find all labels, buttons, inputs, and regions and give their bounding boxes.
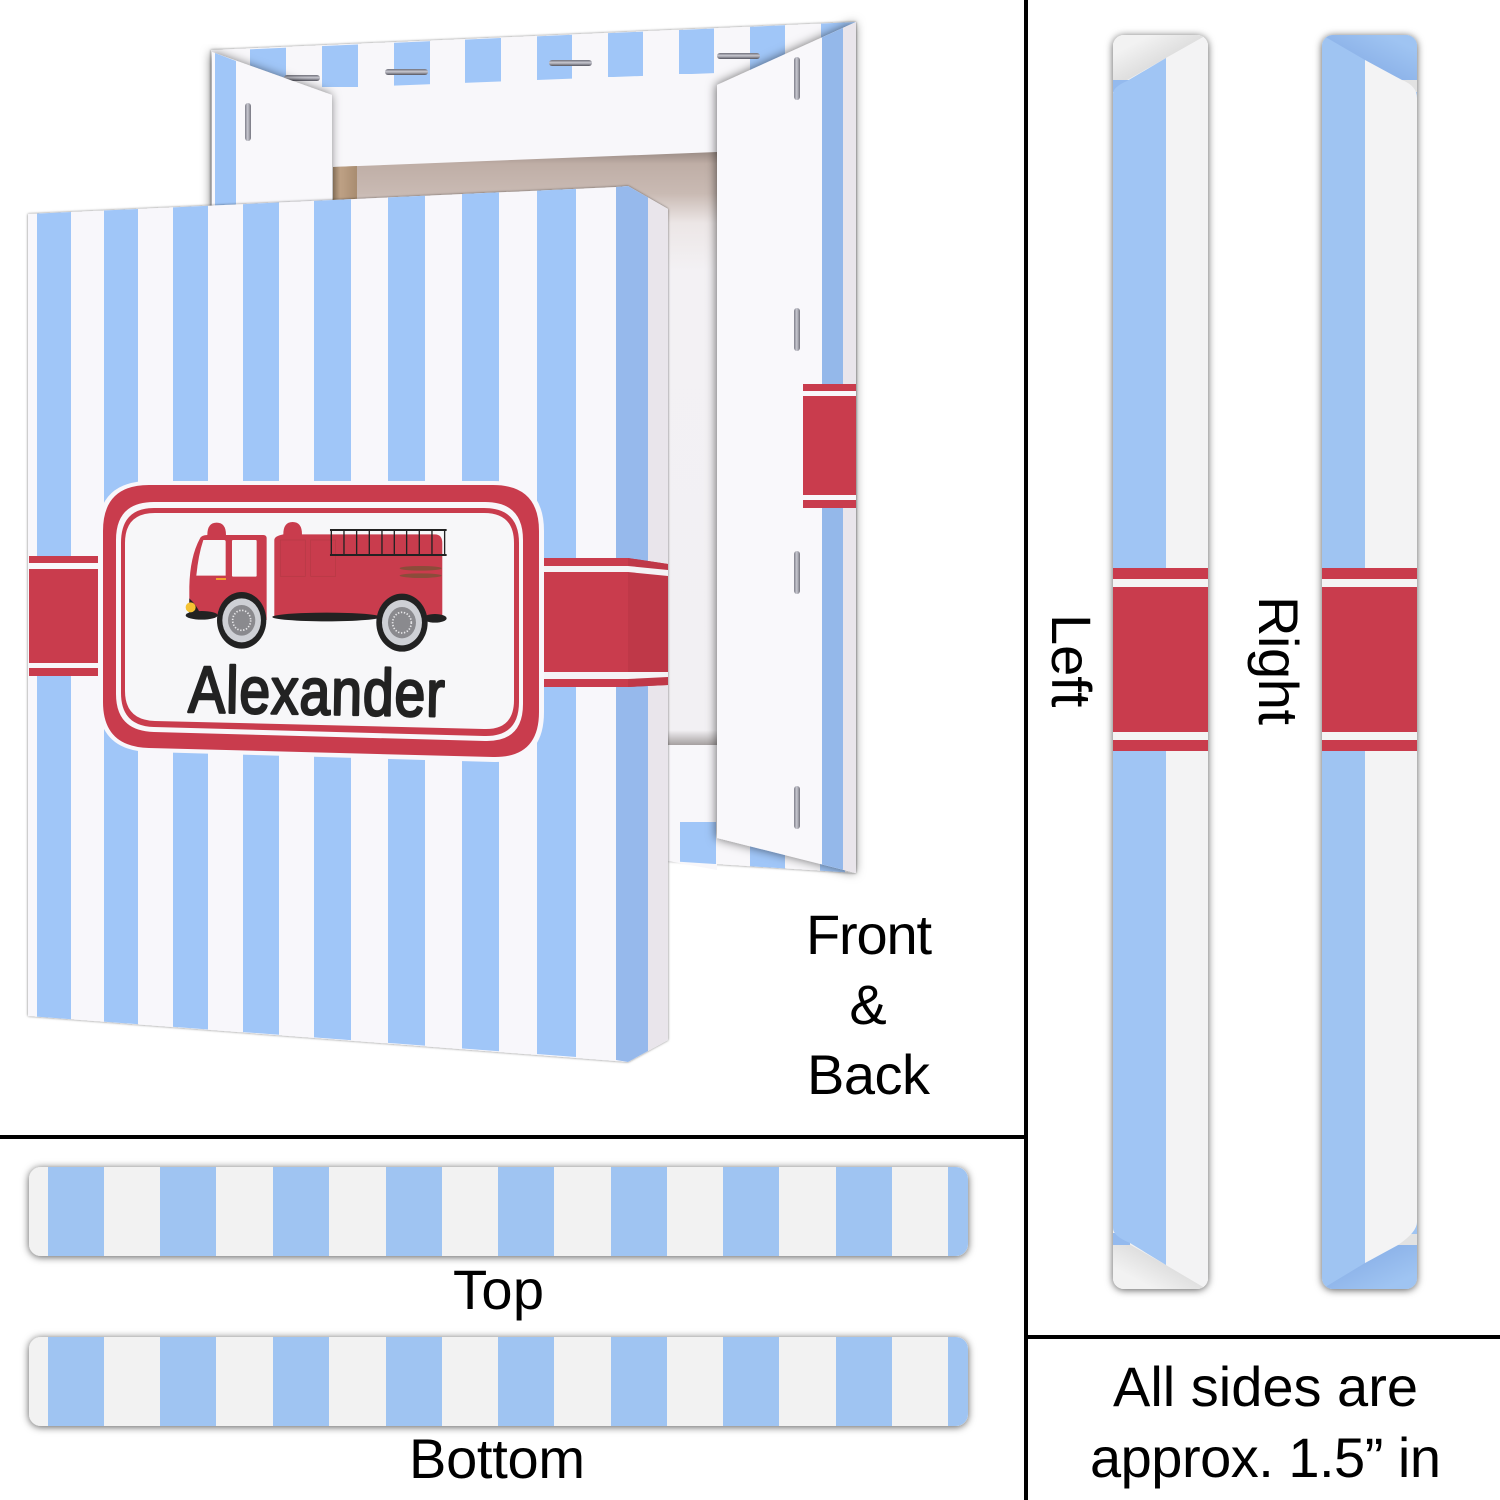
left flap <box>212 52 332 212</box>
fold shading <box>1113 35 1202 80</box>
label: top: Top <box>453 1258 544 1321</box>
chassis <box>272 613 381 621</box>
rear wheel <box>376 594 428 652</box>
blue stripe <box>1113 58 1166 1265</box>
label: front and back <box>806 903 932 1106</box>
white stripe and folds <box>1365 60 1417 1263</box>
back of canvas <box>211 20 860 880</box>
headlight <box>186 602 196 612</box>
top side strip <box>29 1167 968 1256</box>
wooden stretcher bar <box>333 166 357 215</box>
truck body <box>274 522 442 617</box>
name text: Alexander <box>188 652 446 731</box>
plate white ring <box>116 502 523 741</box>
divider: horizontal left <box>0 1135 1024 1139</box>
top staples <box>284 53 760 81</box>
cab window <box>196 540 226 576</box>
canvas body <box>28 186 668 1062</box>
note: side depth: All sides are <box>1113 1355 1418 1418</box>
label: right: Right <box>1247 596 1310 725</box>
fold shading <box>1326 35 1417 80</box>
plate inner white <box>125 513 514 729</box>
bottom strip <box>668 747 717 870</box>
icon: fire truck <box>186 522 447 652</box>
right side strip <box>1322 35 1417 1289</box>
side face <box>616 180 670 1070</box>
back canvas base <box>211 22 856 873</box>
front of canvas <box>28 180 670 1080</box>
hose lines <box>400 566 442 571</box>
band left <box>29 556 98 676</box>
front wheel <box>217 592 266 649</box>
red band on flap <box>803 384 856 508</box>
indicator <box>216 578 226 580</box>
side window <box>232 540 257 577</box>
plate outer red <box>103 485 539 757</box>
front stripes <box>37 180 576 1080</box>
ladder <box>330 530 447 555</box>
label: front and back: & <box>849 973 887 1036</box>
plate thin red <box>121 508 519 736</box>
left side strip <box>1113 35 1208 1289</box>
plate halo <box>98 481 544 762</box>
band right <box>544 558 668 687</box>
divider: horizontal right <box>1028 1335 1500 1339</box>
note: side depth: approx. 1.5” in <box>1090 1426 1441 1489</box>
label: left: Left <box>1040 614 1103 708</box>
folded blue bits <box>1113 80 1129 92</box>
label: front and back: Back <box>807 1043 931 1106</box>
top folded strip stripes <box>250 22 856 87</box>
flap staples <box>794 57 800 829</box>
note: side depth <box>1090 1355 1441 1489</box>
bottom side strip <box>29 1337 968 1426</box>
bottom strip stripes <box>680 820 845 874</box>
fold white <box>1166 36 1208 1288</box>
compartments <box>280 540 305 576</box>
label: bottom: Bottom <box>409 1427 585 1490</box>
divider: vertical <box>1024 0 1028 1500</box>
right flap <box>717 20 856 880</box>
name plate <box>98 481 544 762</box>
red band <box>1322 568 1417 751</box>
inner frame opening <box>333 152 717 745</box>
label: front and back: Front <box>806 903 932 966</box>
folded grey bits <box>1402 80 1417 92</box>
cab <box>189 523 267 620</box>
red band <box>1113 568 1208 751</box>
